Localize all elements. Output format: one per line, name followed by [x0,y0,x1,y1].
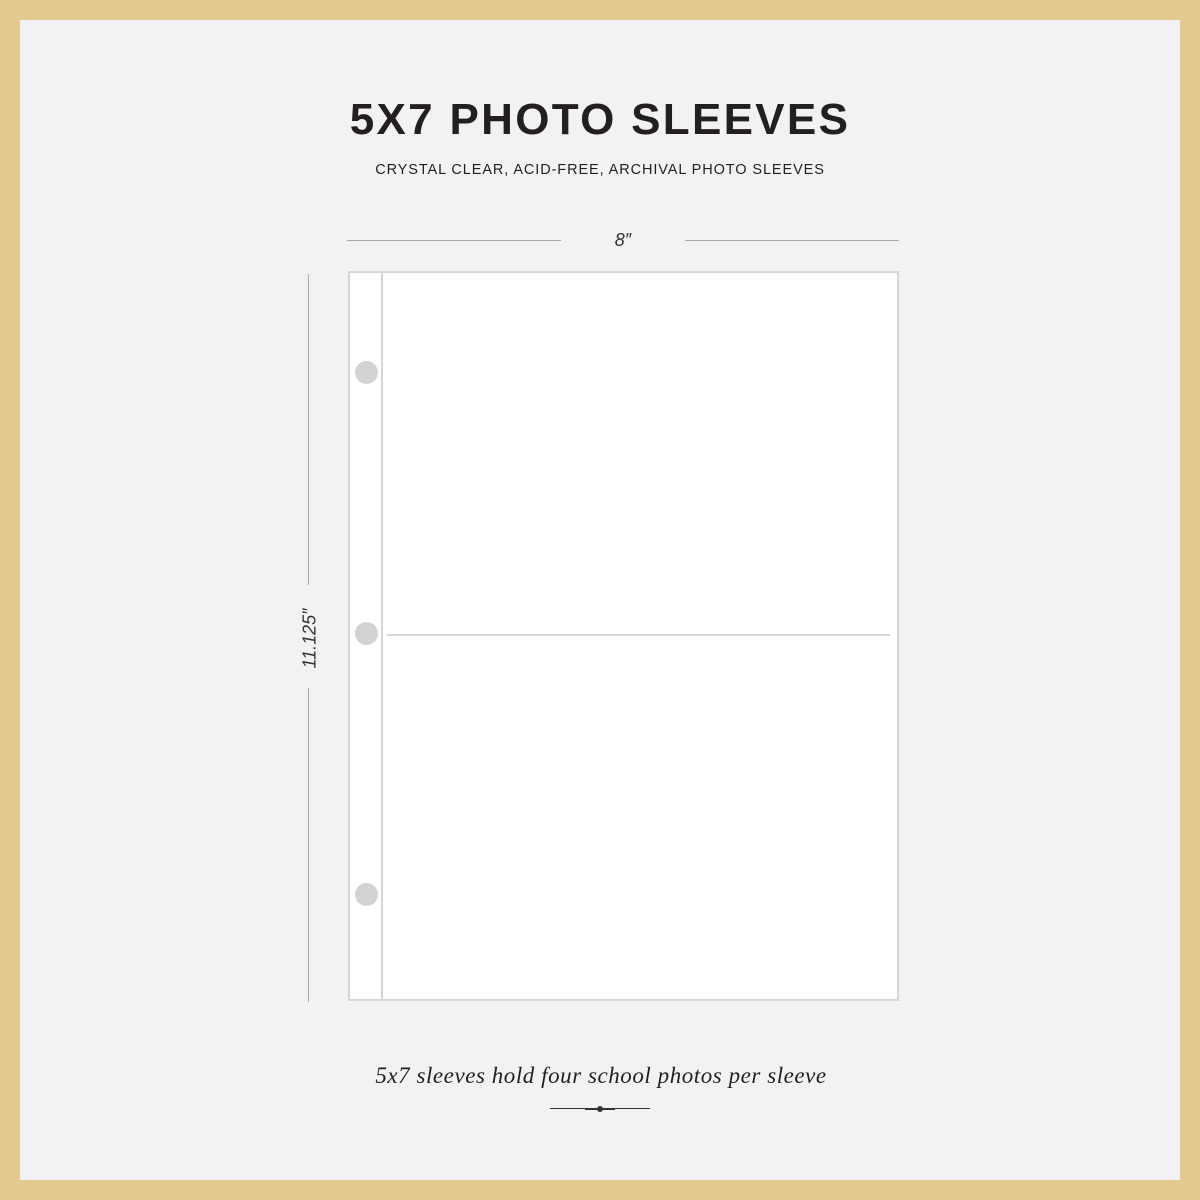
ornament [550,1106,650,1112]
width dimension: 8″ [615,230,631,250]
subtitle: CRYSTAL CLEAR, ACID-FREE, ARCHIVAL PHOTO SLEEVES [375,162,825,178]
binding strip line [381,273,383,999]
hole 2 [355,622,378,645]
height dimension: 11.125″ [300,608,320,669]
sleeve sheet [348,271,899,1001]
hole 3 [355,883,378,906]
caption: 5x7 sleeves hold four school photos per sleeve [375,1063,827,1088]
hole 1 [355,361,378,384]
pocket divider [387,634,890,636]
title: 5X7 PHOTO SLEEVES [350,95,850,144]
